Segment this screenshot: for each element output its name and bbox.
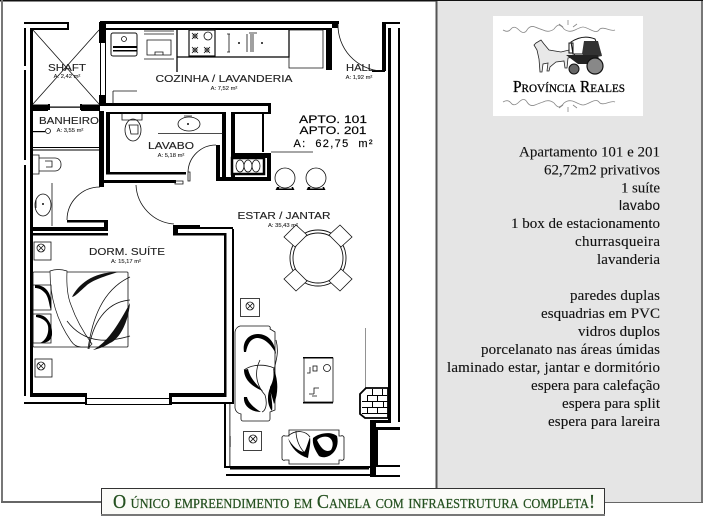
living and dining label: ESTAR / JANTAR <box>238 211 330 222</box>
shaft: A: 2,42 m² <box>54 74 80 80</box>
living and dining label <box>238 211 330 229</box>
finishes list: espera para split <box>562 396 661 412</box>
bathroom: A: 3,55 m² <box>57 128 83 134</box>
bedroom label: DORM. SUÍTE <box>89 245 165 258</box>
lavatory <box>122 113 223 159</box>
barbecue <box>232 158 264 174</box>
bedroom: A: 15,17 m² <box>111 259 141 265</box>
logo <box>493 16 643 116</box>
lavatory basin <box>158 116 223 134</box>
dining table <box>284 225 352 291</box>
finishes list: laminado estar, jantar e dormitório <box>447 360 660 376</box>
washing machine <box>144 31 174 59</box>
walls <box>24 21 400 477</box>
apartment area label: APTO. 201 <box>300 125 366 137</box>
shaft <box>33 30 99 110</box>
finishes list: espera para calefação <box>531 378 660 394</box>
finishes list: paredes duplas <box>570 288 660 304</box>
slogan banner: O único empreendimento em Canela com infraestrutura completa! <box>113 491 595 513</box>
fireplace <box>360 388 388 418</box>
stove <box>189 30 215 56</box>
living and dining label: A: 35,43 m² <box>268 223 298 229</box>
apartment area label: A: 62,75 m² <box>294 138 373 150</box>
kitchen counter <box>113 29 323 104</box>
finishes list: vidros duplos <box>578 324 660 340</box>
pillows <box>33 285 52 343</box>
bed <box>33 270 130 350</box>
finishes list: porcelanato nas áreas úmidas <box>481 342 660 358</box>
bedroom <box>33 242 165 377</box>
ornament top <box>503 20 615 32</box>
property description: Apartamento 101 e 201 <box>519 144 660 160</box>
door arcs <box>67 24 381 224</box>
floor plan <box>24 21 400 477</box>
hall label: HALL <box>346 63 374 74</box>
finishes list: espera para lareira <box>548 414 660 430</box>
bathroom label: BANHEIRO <box>39 116 99 127</box>
apartment area label <box>294 114 373 150</box>
hall label: A: 1,92 m² <box>346 75 372 81</box>
hall label <box>346 63 374 81</box>
property description: churrasqueira <box>575 234 660 250</box>
property description <box>511 144 660 268</box>
property description: 1 suíte <box>621 180 660 196</box>
panel: specifications background <box>436 1 703 502</box>
property description: 1 box de estacionamento <box>511 216 660 232</box>
coffee table <box>303 357 333 404</box>
basin <box>35 183 52 226</box>
horse and carriage <box>534 37 603 74</box>
property description: lavanderia <box>597 252 660 268</box>
nightstand bottom <box>35 359 52 377</box>
ornament bottom <box>503 100 615 112</box>
living room side tables <box>240 298 262 450</box>
shaft label: SHAFT <box>48 63 86 74</box>
armchairs <box>282 430 344 464</box>
lavatory toilet <box>122 113 142 141</box>
kitchen: A: 7,52 m² <box>211 86 237 92</box>
apartment area label: APTO. 101 <box>299 114 367 126</box>
sink <box>111 33 137 56</box>
lavatory label: LAVABO <box>148 141 194 152</box>
property description: lavabo <box>619 198 660 213</box>
finishes list: esquadrias em PVC <box>541 306 660 322</box>
sofa <box>235 326 277 421</box>
stools <box>275 168 326 190</box>
kitchen label: COZINHA / LAVANDERIA <box>156 74 293 85</box>
lavatory: A: 5,18 m² <box>158 153 184 159</box>
toilet <box>33 128 61 174</box>
finishes list <box>447 288 661 430</box>
logo wordmark: Província Reales <box>513 77 625 96</box>
kitchen <box>111 29 323 104</box>
bathroom <box>33 116 99 226</box>
property description: 62,72m2 privativos <box>544 162 660 178</box>
nightstand top <box>34 242 51 260</box>
